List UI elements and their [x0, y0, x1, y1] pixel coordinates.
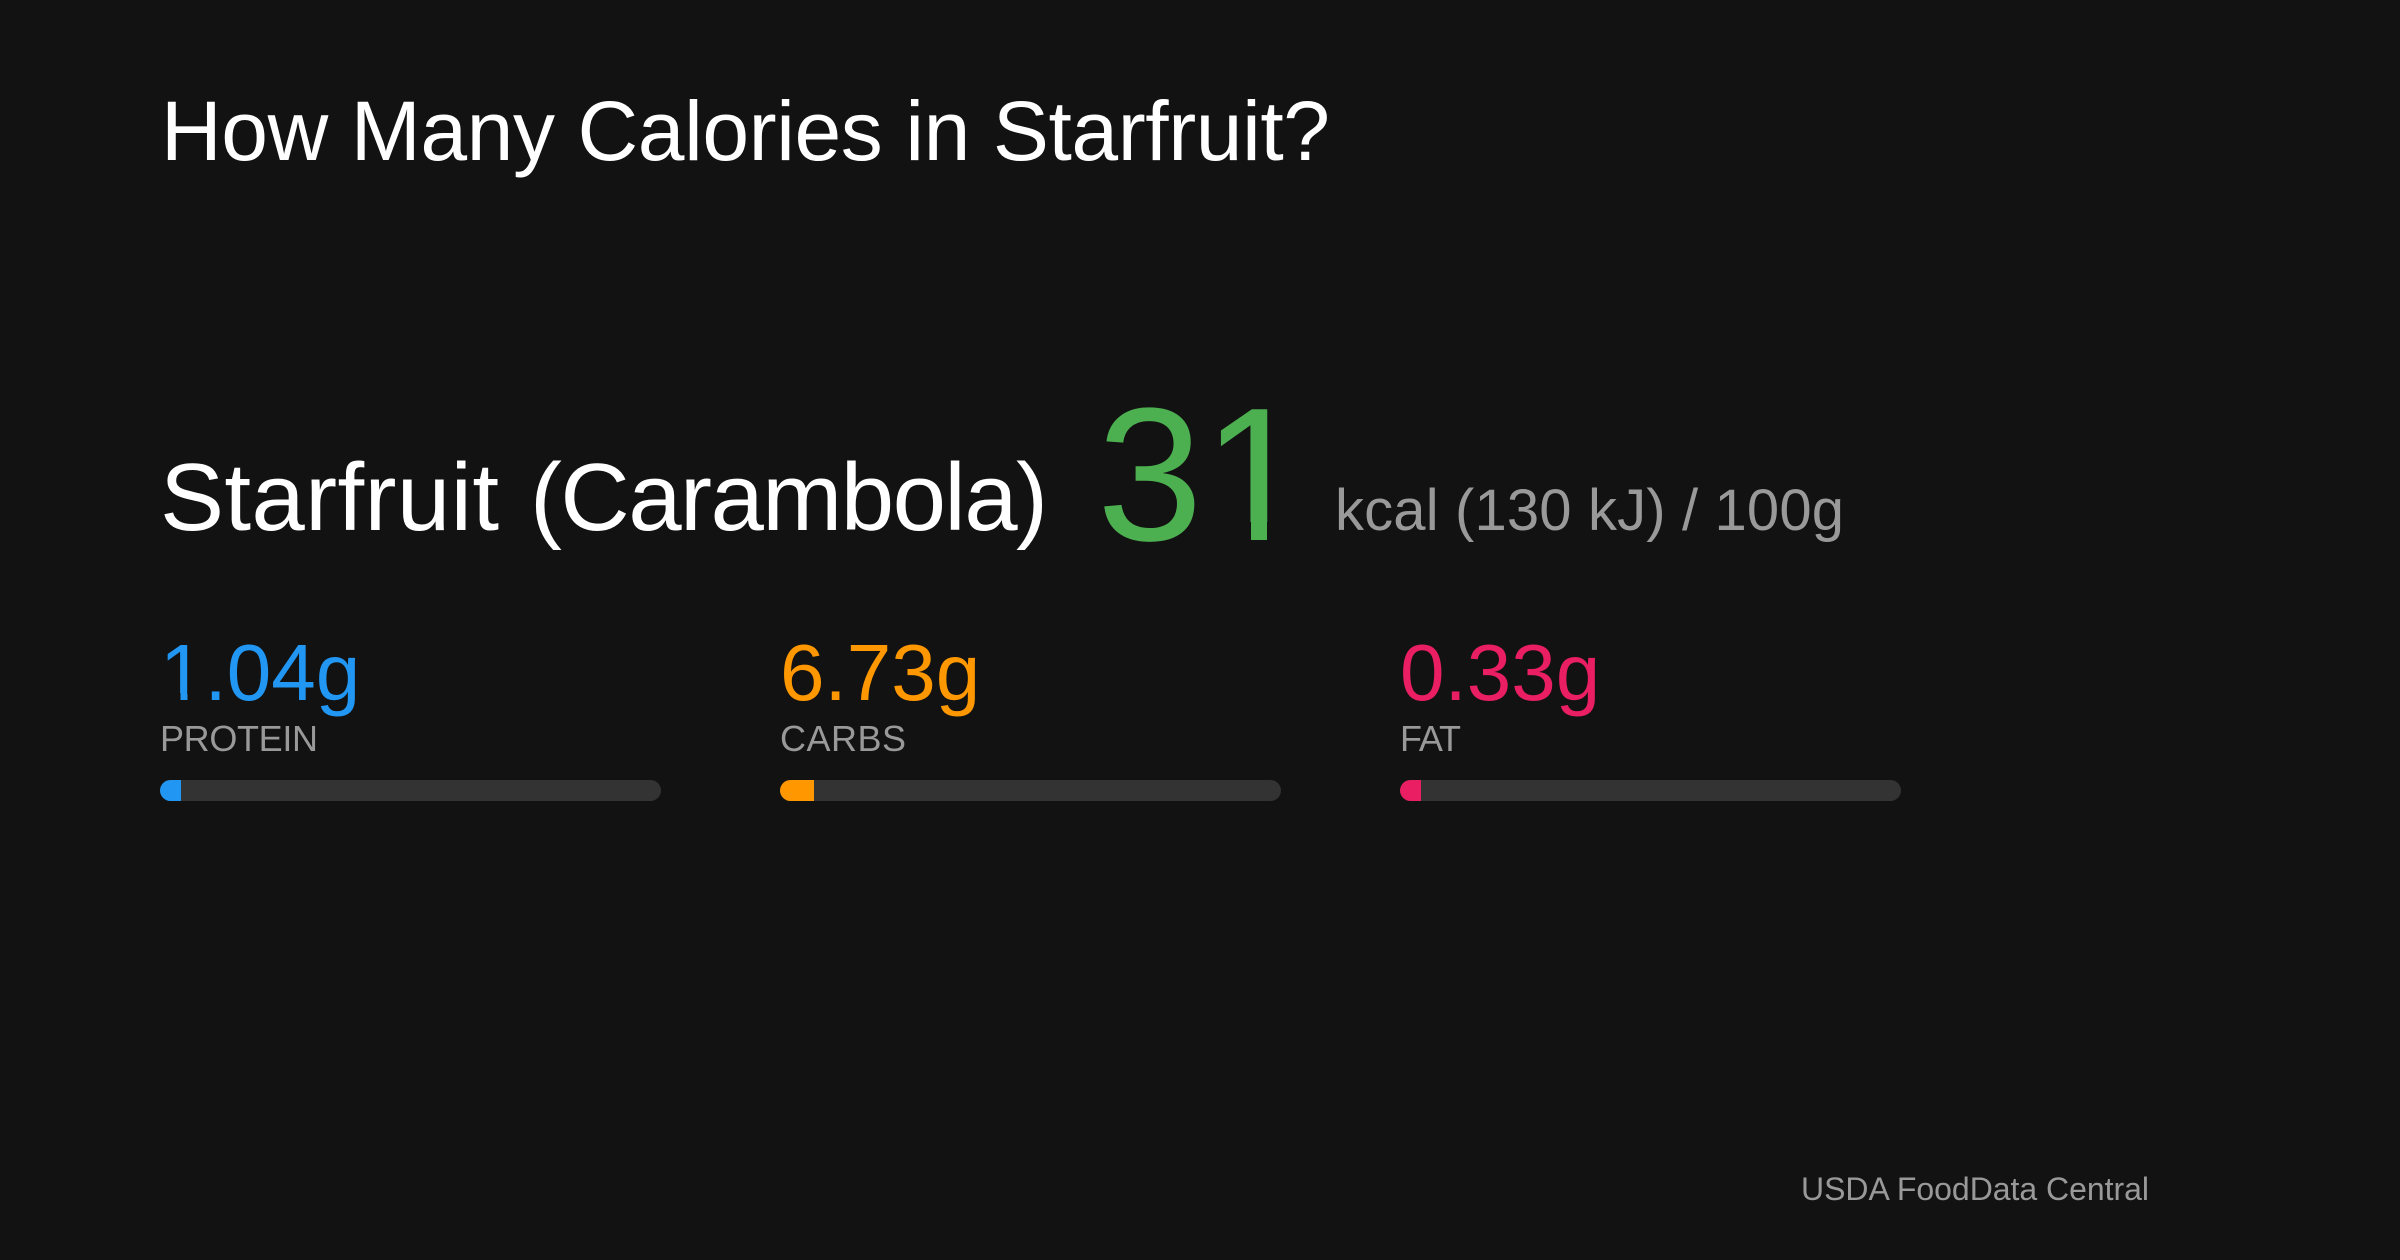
fat label: FAT: [1400, 718, 1461, 759]
protein label: PROTEIN: [160, 718, 318, 759]
source credit: USDA FoodData Central: [1801, 1171, 2149, 1207]
panel: carbs: [780, 628, 1281, 801]
carbs bar track: [780, 780, 1281, 801]
calorie value: 31: [1097, 369, 1308, 581]
calorie headline row: [164, 407, 1840, 550]
panel: protein: [160, 628, 661, 801]
carbs bar fill: [780, 780, 814, 801]
food name: [160, 444, 1048, 551]
fat value: 0.33g: [1400, 628, 1600, 717]
food name: Starfruit: [160, 444, 499, 551]
carbs label: CARBS: [780, 718, 906, 759]
fat bar fill: [1400, 780, 1421, 801]
calorie unit: kcal (130 kJ) / 100g: [1335, 478, 1844, 543]
infographic canvas: [160, 99, 2147, 1200]
protein value: 1.04g: [160, 628, 360, 717]
food name: (Carambola): [530, 444, 1048, 551]
fat bar track: [1400, 780, 1901, 801]
protein bar track: [160, 780, 661, 801]
panel: fat: [1400, 628, 1901, 801]
protein bar fill: [160, 780, 181, 801]
carbs value: 6.73g: [780, 628, 980, 717]
title: How Many Calories in Starfruit?: [161, 84, 1330, 178]
